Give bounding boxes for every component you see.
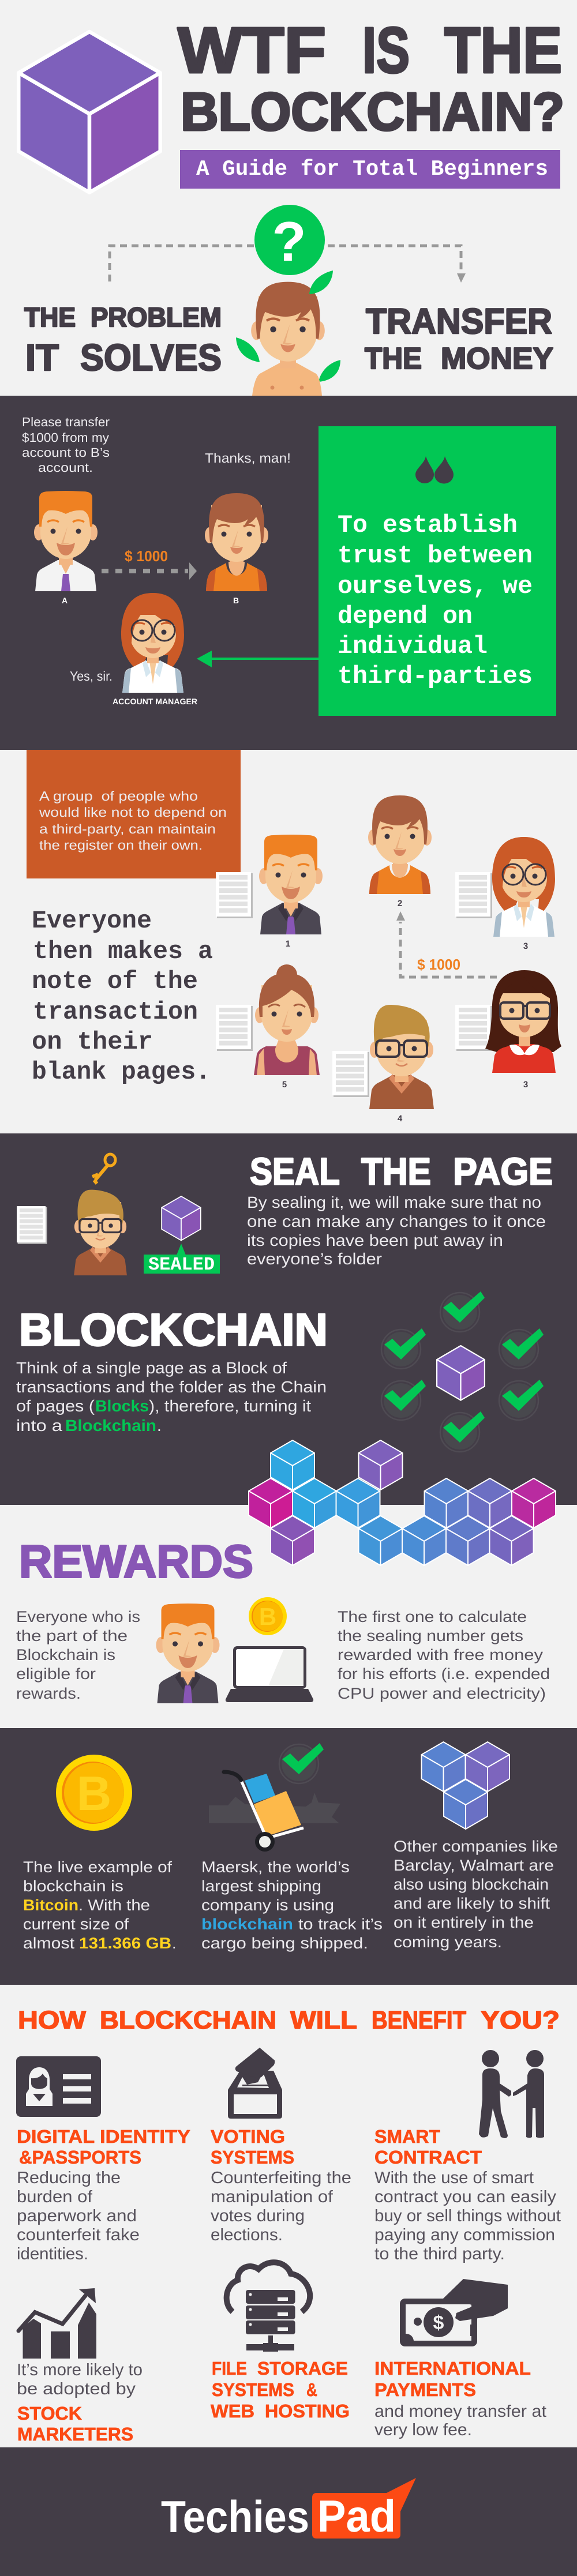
item: stock marketers: MARKETERS [17, 2424, 133, 2444]
panel: rewards section [0, 1505, 577, 1728]
icon: green question mark bubble: ? [272, 210, 306, 273]
text: everyone makes a note: then makes a [33, 938, 213, 966]
text: blockchain description [16, 1359, 327, 1435]
item: digital identity and passports: DIGITAL IDENTITY [17, 2126, 190, 2147]
title: WTF is the blockchain: BLOCKCHAIN? [181, 82, 564, 142]
panel: header section [0, 0, 577, 396]
icon: purple cube logo [18, 32, 160, 193]
diagram: verified block with checkmarks [381, 1291, 544, 1452]
text: blockchain description: ), therefore, turning it [149, 1397, 311, 1415]
item: digital identity and passports: counterfeit fake [17, 2226, 140, 2244]
text: quote: trust between [338, 542, 533, 570]
heading: the problem it solves [24, 302, 222, 378]
item: stock marketers: It’s more likely to [17, 2361, 143, 2379]
text: first to calculate: the sealing number gets [338, 1627, 523, 1644]
icon: quotation mark [415, 456, 454, 483]
text: quote: individual [338, 633, 488, 661]
icon: hand with money [400, 2279, 508, 2346]
person A [34, 491, 98, 605]
icon: check badge [279, 1743, 324, 1783]
item: stock marketers: STOCK [17, 2403, 82, 2424]
label: sealed [144, 1244, 220, 1275]
text: quote: ourselves, we [338, 573, 533, 601]
text: everyone makes a note: on their [32, 1028, 153, 1057]
item: stock marketers [17, 2361, 143, 2444]
heading: transfer the money: THE [365, 342, 422, 375]
text: other companies: also using blockchain [394, 1876, 549, 1893]
item: file storage and web hosting: HOSTING [265, 2401, 350, 2421]
panel: seal and blockchain section [0, 1133, 577, 1505]
item: international payments: very low fee. [374, 2421, 472, 2439]
person sealing [74, 1190, 127, 1275]
logo: TechiesPad: Pad [317, 2491, 396, 2541]
icon: cloud server [227, 2262, 310, 2352]
text: sealing description [247, 1193, 546, 1268]
item: stock marketers: be adopted by [17, 2380, 136, 2398]
item: file storage and web hosting: WEB [211, 2401, 254, 2421]
item: digital identity and passports: Reducing the [17, 2169, 121, 2187]
person 1 with page: 1 [286, 939, 290, 949]
item: international payments: and money transfer at [374, 2402, 546, 2421]
text: everyone eligible [16, 1608, 140, 1702]
heading: how blockchain will benefit you: HOW [18, 2006, 87, 2034]
item: file storage and web hosting: SYSTEMS [212, 2379, 294, 2400]
item: voting systems: elections. [211, 2226, 283, 2244]
arrow: $1000 dashed path between peers [396, 911, 497, 977]
text: bitcoin example: almost [23, 1935, 75, 1952]
person 3 with page [455, 837, 555, 951]
person B [205, 493, 268, 605]
item: digital identity and passports: paperwork and [17, 2207, 137, 2225]
heading: transfer the money: MONEY [441, 342, 553, 375]
person A: A [62, 596, 68, 605]
panel: benefits section [0, 1985, 577, 2447]
item: smart contract [374, 2126, 561, 2263]
text: first to calculate: The first one to calculate [338, 1608, 527, 1625]
text: sealing description: one can make any changes to it once [247, 1212, 546, 1230]
text: blockchain description: Think of a single page as a Block of [16, 1359, 287, 1377]
item: smart contract: SMART [374, 2126, 440, 2147]
panel: real world examples [0, 1728, 577, 1985]
logo: TechiesPad: Techies [161, 2491, 309, 2542]
text: please transfer speech: account. [38, 460, 93, 475]
text: thanks man: Thanks, man! [205, 450, 291, 465]
person 2: 2 [398, 899, 402, 908]
item: voting systems: manipulation of [211, 2188, 334, 2206]
text: maersk example: cargo being shipped. [201, 1935, 368, 1952]
item: smart contract: to the third party. [374, 2245, 505, 2263]
heading: transfer the money: TRANSFER [366, 302, 552, 341]
icon: dashed connector with arrow [110, 246, 466, 286]
text: bitcoin example: 131.366 GB [79, 1935, 171, 1952]
heading: rewards: REWARDS [19, 1535, 253, 1587]
text: blockchain description: into a [16, 1417, 62, 1435]
text: everyone eligible: the part of the [16, 1627, 128, 1644]
diagram: chain of coloured blocks [249, 1440, 556, 1565]
text: blockchain description: of pages ( [16, 1397, 95, 1415]
panel: peer group section [0, 750, 577, 1133]
heading: the problem it solves: THE [24, 302, 76, 332]
text: sealing description: By sealing it, we will make sure that no [247, 1193, 541, 1211]
text: first to calculate [338, 1608, 550, 1702]
title: WTF is the blockchain: WTF [178, 14, 326, 87]
item: smart contract: contract you can easily [374, 2188, 557, 2206]
item: international payments: INTERNATIONAL [374, 2358, 531, 2379]
icon: hand with money: $ [433, 2312, 444, 2334]
item: file storage and web hosting: STORAGE [257, 2358, 348, 2379]
item: voting systems: SYSTEMS [211, 2147, 294, 2168]
arrow: $1000 transfer [102, 547, 197, 580]
text: everyone eligible: Everyone who is [16, 1608, 140, 1625]
icon: key [92, 1154, 115, 1184]
icon: voting box [228, 2048, 282, 2119]
panel: problem with third parties [0, 396, 577, 750]
text: blockchain description: transactions and the folder as the Chain [16, 1378, 327, 1396]
text: other companies: and are likely to shift [394, 1895, 550, 1912]
illustration: seal the page scene [17, 1154, 220, 1275]
text: please transfer speech: Please transfer [22, 415, 110, 429]
heading: blockchain: BLOCKCHAIN [19, 1304, 328, 1355]
text: bitcoin example: current size of [23, 1916, 129, 1933]
text: everyone makes a note: transaction [33, 998, 198, 1027]
callout: orange text box: the register on their own. [39, 838, 203, 853]
icon: three blocks [421, 1742, 509, 1829]
item: smart contract: With the use of smart [374, 2169, 534, 2187]
icon: laptop [226, 1646, 313, 1702]
text: first to calculate: rewarded with free money [338, 1646, 544, 1663]
text: other companies [394, 1838, 558, 1951]
text: maersk example: blockchain [201, 1916, 293, 1933]
item: smart contract: paying any commission [374, 2226, 555, 2244]
text: other companies: on it entirely in the [394, 1914, 534, 1931]
arrow: green pointer to manager [197, 651, 319, 667]
text: blockchain description: Blocks [95, 1397, 149, 1415]
heading: how blockchain will benefit you: YOU? [481, 2006, 560, 2034]
person 4 with page [332, 1005, 434, 1124]
callout: orange text box: a third-party, can maintain [39, 821, 216, 836]
heading: how blockchain will benefit you [18, 2006, 560, 2034]
text: other companies: coming years. [394, 1933, 502, 1951]
item: international payments [374, 2358, 546, 2439]
arrow: $1000 dashed path between peers: $ 1000 [417, 956, 460, 973]
text: everyone makes a note: Everyone [32, 907, 152, 936]
callout: orange text box: A group of people who [39, 788, 198, 803]
heading: transfer the money [365, 302, 553, 375]
callout: orange text box: would like not to depend on [39, 805, 227, 820]
icon: handshake [479, 2050, 544, 2138]
text: quote: third-parties [338, 663, 533, 691]
callout: orange text box [27, 750, 241, 878]
text: bitcoin example: . [172, 1935, 177, 1952]
text: sealing description: everyone’s folder [247, 1250, 382, 1268]
subtitle banner [180, 150, 560, 189]
person 2 [368, 795, 432, 908]
person 1 with page [216, 835, 323, 949]
text: sealing description: its copies have been put away in [247, 1231, 503, 1249]
heading: how blockchain will benefit you: BENEFIT [372, 2006, 466, 2034]
person: miner [156, 1604, 219, 1703]
label: sealed: SEALED [148, 1254, 215, 1275]
title: WTF is the blockchain: THE [444, 14, 562, 87]
item: digital identity and passports: identities. [17, 2245, 88, 2263]
text: maersk example: largest shipping [201, 1877, 321, 1895]
item: smart contract: CONTRACT [374, 2147, 482, 2168]
text: blockchain description: . [157, 1417, 162, 1435]
item: file storage and web hosting: FILE [212, 2358, 247, 2379]
item: smart contract: buy or sell things without [374, 2207, 561, 2225]
text: please transfer speech: account to B’s [22, 445, 110, 460]
icon: identity card [16, 2056, 101, 2117]
text: maersk example: to track it’s [298, 1916, 383, 1933]
icon: bitcoin large [56, 1755, 132, 1831]
subtitle banner: A Guide for Total Beginners [196, 157, 548, 182]
text: quote: To establish [338, 512, 518, 540]
callout: quote box [319, 426, 556, 716]
item: voting systems: Counterfeiting the [211, 2169, 351, 2187]
illustration: shipping trolley [209, 1743, 340, 1852]
text: everyone eligible: Blockchain is [16, 1646, 115, 1663]
text: bitcoin example [23, 1858, 177, 1952]
person 3 dark hair with page: 3 [523, 1080, 528, 1090]
item: digital identity and passports [17, 2126, 190, 2263]
heading: the problem it solves: IT [25, 336, 59, 378]
icon: green question mark bubble [254, 205, 325, 275]
text: bitcoin example: . With the [78, 1897, 150, 1914]
person 3 with page: 3 [523, 941, 528, 951]
person 5 with page [216, 964, 320, 1090]
text: first to calculate: for his efforts (i.e. expended [338, 1665, 550, 1683]
text: bitcoin example: blockchain is [23, 1877, 123, 1895]
text: maersk example: company is using [201, 1897, 334, 1914]
panel: footer [0, 2447, 577, 2576]
title: WTF is the blockchain: IS [362, 14, 410, 87]
text: everyone eligible: rewards. [16, 1685, 81, 1702]
heading: the problem it solves: SOLVES [80, 336, 222, 378]
item: voting systems: votes during [211, 2207, 305, 2225]
item: voting systems: VOTING [211, 2126, 285, 2147]
icon: ship silhouette [209, 1793, 340, 1823]
person 3 dark hair with page [455, 970, 561, 1090]
text: everyone makes a note: blank pages. [32, 1058, 211, 1087]
text: blockchain description: Blockchain [65, 1417, 156, 1435]
icon: sealed cube [162, 1196, 201, 1241]
text: everyone makes a note [32, 907, 213, 1087]
heading: how blockchain will benefit you: WILL [290, 2006, 357, 2034]
heading: how blockchain will benefit you: BLOCKCHAIN [100, 2006, 276, 2034]
icon: boxes and trolley [224, 1772, 304, 1852]
text: please transfer speech [22, 415, 110, 475]
text: quote: depend on [338, 603, 473, 631]
item: international payments: PAYMENTS [374, 2379, 476, 2400]
text: other companies: Barclay, Walmart are [394, 1857, 554, 1874]
item: digital identity and passports: &PASSPORTS [19, 2147, 141, 2168]
title: WTF is the blockchain [178, 14, 564, 142]
icon: blank page [17, 1206, 47, 1244]
heading: seal the page: SEAL [250, 1150, 340, 1193]
text: other companies: Other companies like [394, 1838, 558, 1855]
icon: stock chart [18, 2288, 96, 2359]
illustration: thinking man with leaves [236, 271, 340, 396]
item: digital identity and passports: burden of [17, 2188, 93, 2206]
text: everyone makes a note: note of the [32, 968, 198, 996]
arrow: $1000 transfer: $ 1000 [125, 547, 168, 565]
text: maersk example [201, 1858, 383, 1952]
person B: B [233, 596, 239, 605]
person 5 with page: 5 [282, 1080, 287, 1090]
person: account manager: ACCOUNT MANAGER [113, 697, 197, 706]
heading: seal the page [250, 1150, 553, 1193]
text: maersk example: Maersk, the world’s [201, 1858, 350, 1876]
item: voting systems [211, 2126, 351, 2244]
logo: TechiesPad [161, 2478, 416, 2542]
person: account manager [113, 593, 197, 706]
heading: seal the page: PAGE [453, 1150, 553, 1193]
text: everyone eligible: eligible for [16, 1665, 96, 1683]
text: quote [338, 512, 533, 691]
text: first to calculate: CPU power and electricity) [338, 1685, 546, 1702]
text: please transfer speech: $1000 from my [22, 430, 109, 445]
heading: seal the page: THE [361, 1150, 431, 1193]
person 4 with page: 4 [398, 1114, 403, 1124]
text: bitcoin example: The live example of [23, 1858, 173, 1876]
item: file storage and web hosting [211, 2358, 350, 2421]
text: bitcoin example: Bitcoin [23, 1897, 78, 1914]
text: yes sir: Yes, sir. [70, 669, 113, 684]
heading: the problem it solves: PROBLEM [91, 302, 222, 332]
item: file storage and web hosting: & [306, 2379, 317, 2400]
icon: bitcoin small [249, 1597, 287, 1635]
